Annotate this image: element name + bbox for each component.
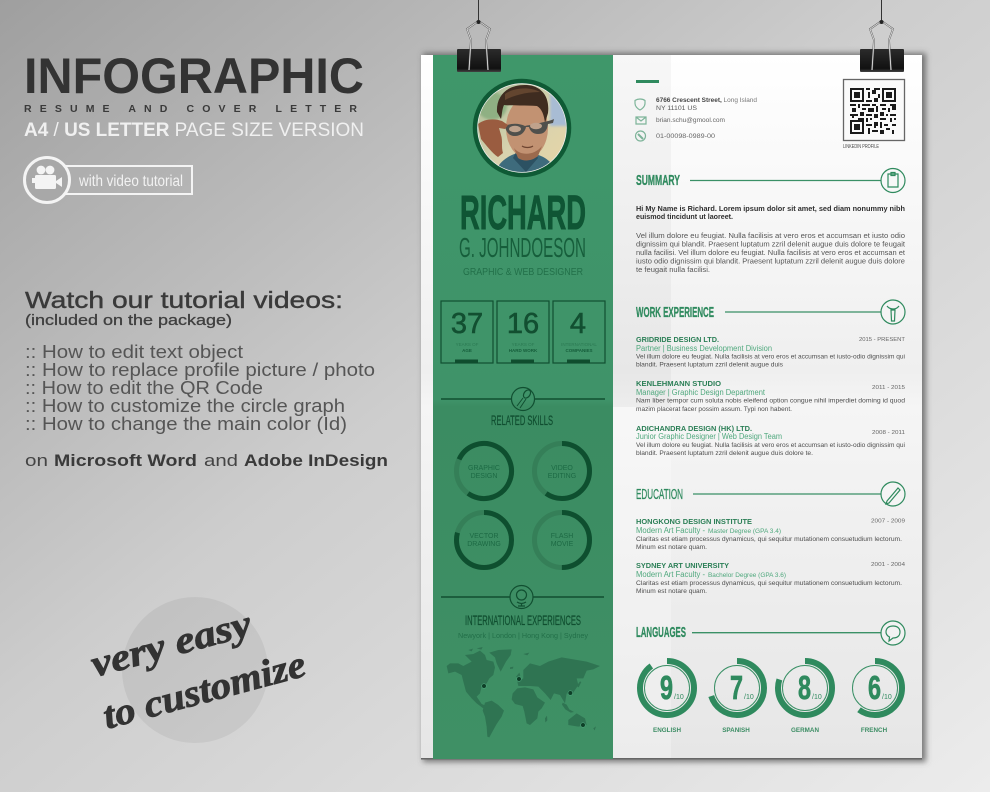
job title: GRAPHIC & WEB DESIGNER bbox=[463, 267, 583, 278]
tutorial subheading: (included on the package) bbox=[25, 313, 232, 329]
video tutorial badge bbox=[24, 158, 192, 202]
job: adichandra: blandit. Praesent luptatum zzril delenit augue duis dolore te. bbox=[636, 450, 813, 457]
job: gridride: blandit. Praesent luptatum zzril delenit augue duis bbox=[636, 362, 783, 368]
summary text: iusto odio dignissim qui blandit. Praesent luptatum zzril delenit augue duis dolore bbox=[636, 258, 905, 266]
panel: green sidebar bbox=[433, 55, 613, 759]
job: adichandra: Vel illum dolore eu feugiat. Nulla facilisis at vero eros et accumsan et iusto-odio dignissim qui bbox=[636, 442, 905, 449]
donut: flash movie: FLASH bbox=[551, 533, 573, 540]
summary text: nulla facilisi. Vel illum dolore eu feugiat. Nulla facilisis at vero eros et accumsan et bbox=[636, 250, 905, 257]
summary text bbox=[636, 206, 905, 274]
binder clip: right bbox=[860, 0, 904, 72]
page size line: A4 / US LETTER PAGE SIZE VERSION bbox=[24, 119, 364, 141]
icon: video camera bbox=[32, 166, 62, 189]
donut: vector drawing bbox=[456, 512, 512, 568]
job: gridride: 2015 - PRESENT bbox=[859, 337, 906, 343]
section: work experience: WORK EXPERIENCE bbox=[636, 304, 714, 321]
stat: companies: COMPANIES bbox=[566, 348, 592, 353]
donut: video editing bbox=[534, 444, 590, 498]
name: RICHARD bbox=[460, 187, 586, 240]
job: adichandra: 2008 - 2011 bbox=[872, 430, 905, 436]
section: languages: LANGUAGES bbox=[636, 624, 686, 641]
international heading: INTERNATIONAL EXPERIENCES bbox=[465, 612, 581, 628]
job: kenlehmann: 2011 - 2015 bbox=[872, 385, 905, 391]
donut: graphic design: GRAPHIC bbox=[468, 465, 500, 472]
tutorial list bbox=[25, 342, 375, 434]
city list: Newyork | London | Hong Kong | Sydney bbox=[458, 633, 589, 640]
job: kenlehmann: mazim placerat facer possim assum. Typi non habent. bbox=[636, 406, 792, 413]
software line: on bbox=[25, 452, 48, 470]
script callout: very easy to customize bbox=[86, 603, 310, 738]
summary text: te feugait nulla facilisi. bbox=[636, 267, 710, 274]
script callout: very easy to customize: very easy bbox=[86, 603, 256, 686]
job: adichandra: ADICHANDRA DESIGN (HK) LTD. bbox=[636, 424, 752, 433]
donut: video editing: VIDEO bbox=[551, 465, 573, 472]
job: gridride: Vel illum dolore eu feugiat. Nulla facilisis at vero eros et accumsan et iusto-odio dignissim qui bbox=[636, 354, 905, 360]
gauge: english 9/10: 9 bbox=[660, 669, 673, 706]
gauge: english 9/10 bbox=[640, 661, 694, 734]
stat: companies bbox=[553, 301, 605, 363]
school: sydney: Minum est notare quam. bbox=[636, 588, 707, 595]
gauge: spanish 7/10 bbox=[710, 661, 764, 734]
international divider with globe icon bbox=[441, 586, 604, 608]
gauge: french 6/10 bbox=[848, 661, 902, 734]
donut: graphic design: DESIGN bbox=[471, 473, 497, 480]
gauge: spanish 7/10: /10 bbox=[744, 694, 754, 701]
tutorial list: :: How to edit text object bbox=[25, 342, 243, 362]
icon: phone bbox=[636, 131, 646, 141]
icon: email bbox=[636, 117, 646, 124]
stat: age: 37 bbox=[451, 308, 483, 340]
gauge: spanish 7/10: 7 bbox=[730, 669, 743, 706]
school: sydney: Modern Art Faculty - bbox=[636, 570, 705, 579]
gauge: english 9/10: /10 bbox=[674, 694, 684, 701]
gauge: french 6/10: /10 bbox=[882, 694, 892, 701]
binder clip: left bbox=[457, 0, 501, 72]
gauge: french 6/10: 6 bbox=[868, 669, 881, 706]
section: summary: SUMMARY bbox=[636, 172, 680, 189]
profile photo bbox=[475, 81, 569, 175]
QR caption: LINKEDIN PROFILE bbox=[843, 144, 879, 150]
section: summary bbox=[636, 168, 905, 274]
contact details bbox=[635, 97, 758, 141]
stat: age: AGE bbox=[462, 348, 472, 353]
contact details: brian.schu@gmool.com bbox=[656, 117, 725, 124]
job: adichandra bbox=[636, 424, 905, 457]
gauge: french 6/10: FRENCH bbox=[861, 727, 888, 734]
donut: graphic design bbox=[447, 434, 521, 508]
map pins bbox=[482, 677, 585, 727]
school: sydney: 2001 - 2004 bbox=[871, 562, 905, 568]
software line: and bbox=[204, 452, 238, 470]
school: hongkong: 2007 - 2009 bbox=[871, 518, 905, 524]
section: education: EDUCATION bbox=[636, 486, 683, 503]
tutorial list: :: How to edit the QR Code bbox=[25, 378, 263, 398]
job: gridride: Partner | Business Development Division bbox=[636, 344, 772, 353]
job: gridride bbox=[636, 335, 906, 368]
summary text: dignissim qui blandit. Praesent luptatum zzril delenit augue duis dolore te feugait bbox=[636, 242, 905, 248]
icon: location bbox=[635, 99, 645, 110]
tutorial list: :: How to change the main color (Id) bbox=[25, 414, 347, 434]
skills divider with microphone icon bbox=[441, 388, 605, 410]
icon: clipboard bbox=[881, 168, 905, 192]
skills heading: RELATED SKILLS bbox=[491, 412, 553, 428]
summary text: Vel illum dolore eu feugiat. Nulla facilisis at vero eros et accumsan et iusto odio bbox=[636, 233, 905, 240]
donut: vector drawing: VECTOR bbox=[469, 533, 499, 540]
contact details: 6766 Crescent Street, Long Island bbox=[656, 97, 758, 104]
gauge: german 8/10: 8 bbox=[798, 669, 811, 706]
stat: companies: 4 bbox=[570, 308, 586, 340]
tutorial list: :: How to replace profile picture / photo bbox=[25, 360, 375, 380]
software line bbox=[25, 452, 388, 470]
decorative circle bbox=[122, 597, 268, 743]
job: adichandra: Junior Graphic Designer | Web Design Team bbox=[636, 432, 782, 441]
gauge: english 9/10: ENGLISH bbox=[653, 727, 681, 734]
gauge: spanish 7/10: SPANISH bbox=[722, 727, 750, 734]
donut: video editing: EDITING bbox=[548, 473, 576, 480]
stat: hard work: YEARS OF bbox=[512, 342, 535, 347]
software line: Adobe InDesign bbox=[244, 452, 388, 470]
gauge: german 8/10: /10 bbox=[812, 694, 822, 701]
subtitle: RESUME AND COVER LETTER bbox=[24, 103, 357, 115]
school: hongkong: Claritas est etiam processus dynamicus, qui sequitur mutationem consuetudium lectorum. bbox=[636, 536, 902, 543]
stat: hard work bbox=[497, 301, 549, 363]
contact details: NY 11101 US bbox=[656, 105, 697, 112]
icon: speech bubble bbox=[881, 621, 905, 645]
school: sydney: Claritas est etiam processus dynamicus, qui sequitur mutationem consuetudium lectorum. bbox=[636, 580, 902, 587]
donut: vector drawing: DRAWING bbox=[467, 541, 501, 548]
job: kenlehmann: KENLEHMANN STUDIO bbox=[636, 379, 721, 388]
school: hongkong: HONGKONG DESIGN INSTITUTE bbox=[636, 517, 752, 526]
surname: G. JOHNDOESON bbox=[459, 232, 586, 263]
section: work experience bbox=[636, 300, 906, 457]
school: hongkong: Modern Art Faculty - bbox=[636, 526, 705, 535]
school: sydney: Bachelor Degree (GPA 3.6) bbox=[708, 573, 786, 579]
tutorial heading: Watch our tutorial videos: bbox=[25, 287, 343, 313]
world map bbox=[447, 647, 600, 737]
resume sheet bbox=[421, 55, 922, 760]
title: INFOGRAPHIC bbox=[24, 48, 364, 104]
contact details: 01-00098-0989-00 bbox=[656, 133, 716, 140]
school: hongkong: Master Degree (GPA 3.4) bbox=[708, 529, 781, 535]
accent bar bbox=[636, 80, 659, 83]
stat: hard work: HARD WORK bbox=[509, 348, 538, 353]
job: kenlehmann: Nam liber tempor cum soluta nobis eleifend option congue nihil imperdiet doming id quod bbox=[636, 398, 906, 405]
tutorial list: :: How to customize the circle graph bbox=[25, 396, 345, 416]
section: education bbox=[636, 482, 905, 595]
summary text: euismod tincidunt ut laoreet. bbox=[636, 214, 733, 221]
school: sydney: SYDNEY ART UNIVERSITY bbox=[636, 561, 729, 570]
donut: flash movie: MOVIE bbox=[551, 541, 574, 548]
gauge: german 8/10 bbox=[778, 661, 832, 734]
donut: flash movie bbox=[534, 512, 590, 568]
gauge: german 8/10: GERMAN bbox=[791, 727, 819, 734]
stat: age: YEARS OF bbox=[456, 342, 479, 347]
job: kenlehmann bbox=[636, 379, 906, 413]
stat: hard work: 16 bbox=[507, 308, 539, 340]
software line: Microsoft Word bbox=[54, 452, 197, 470]
stat: age bbox=[441, 301, 493, 363]
school: hongkong: Minum est notare quam. bbox=[636, 544, 707, 551]
summary text: Hi My Name is Richard. Lorem ipsum dolor sit amet, sed diam nonummy nibh bbox=[636, 206, 905, 213]
job: gridride: GRIDRIDE DESIGN LTD. bbox=[636, 335, 719, 344]
school: hongkong bbox=[636, 517, 905, 551]
paper shadow bbox=[423, 53, 926, 762]
school: sydney bbox=[636, 561, 905, 595]
QR code bbox=[843, 80, 904, 150]
stat: companies: INTERNATIONAL bbox=[561, 342, 597, 347]
icon: pencil bbox=[881, 482, 905, 506]
job: kenlehmann: Manager | Graphic Design Department bbox=[636, 388, 766, 397]
section: languages bbox=[636, 621, 905, 734]
badge label: with video tutorial bbox=[78, 173, 183, 190]
icon: tools bbox=[881, 300, 905, 324]
script callout: very easy to customize: to customize bbox=[98, 643, 310, 738]
